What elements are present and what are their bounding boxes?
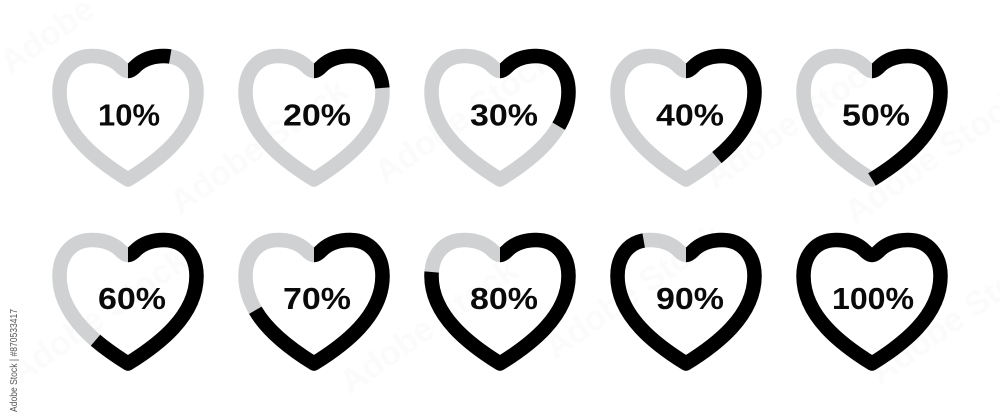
heart gauge 40%	[618, 56, 754, 180]
heart gauge 50%	[804, 56, 940, 180]
label 60%: 60%	[98, 281, 166, 316]
black full ring	[804, 240, 940, 364]
label 70%: 70%	[283, 281, 351, 316]
faint watermark pattern: Adobe Stock	[538, 216, 730, 367]
faint watermark pattern: Adobe Stock	[3, 241, 195, 392]
black progress 80%	[432, 240, 568, 364]
label 40%: 40%	[656, 98, 724, 132]
gray track	[246, 240, 382, 364]
black progress 60%	[60, 240, 196, 364]
label 90%: 90%	[656, 281, 724, 316]
gray track	[60, 56, 196, 180]
heart gauge 80%	[432, 240, 568, 364]
label 30%: 30%	[470, 98, 538, 132]
label 10%: 10%	[98, 98, 160, 132]
label 80%: 80%	[470, 281, 538, 316]
black progress 70%	[246, 240, 382, 364]
gray track	[60, 240, 196, 364]
black progress 90%	[618, 240, 754, 364]
heart gauge 30%	[432, 56, 568, 180]
black progress 10%	[60, 56, 196, 180]
faint watermark pattern: Adobe Stock	[698, 46, 890, 197]
gray track	[618, 240, 754, 364]
gray track	[246, 56, 382, 180]
faint watermark pattern: Adobe Stock	[333, 251, 525, 402]
label 20%: 20%	[283, 98, 351, 132]
faint watermark pattern: Adobe Stock	[368, 41, 560, 192]
stock id credit: Adobe Stock | #870533417	[9, 309, 20, 412]
heart gauge 60%	[60, 240, 196, 364]
black progress 20%	[246, 56, 382, 180]
gray track	[618, 56, 754, 180]
gray track	[804, 56, 940, 180]
heart gauge 10%	[60, 56, 196, 180]
heart gauge 100%	[804, 240, 940, 364]
black progress 30%	[432, 56, 568, 180]
label 50%: 50%	[842, 98, 910, 132]
label 100%: 100%	[832, 281, 914, 316]
gray track	[432, 56, 568, 180]
faint watermark pattern: Adobe Stock	[163, 71, 355, 222]
heart gauge 70%	[246, 240, 382, 364]
heart gauge 20%	[246, 56, 382, 180]
gray track	[432, 240, 568, 364]
heart gauge 90%	[618, 240, 754, 364]
black progress 40%	[618, 56, 754, 180]
black progress 50%	[804, 56, 940, 180]
